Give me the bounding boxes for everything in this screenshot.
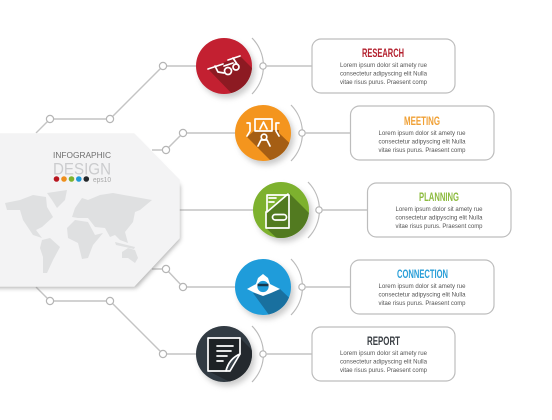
connection box: Lorem ipsum dolor sit amety rue [378,283,466,290]
item: connection [235,258,495,322]
panel title: INFOGRAPHIC [53,151,111,160]
report icon circle [196,326,262,386]
research arc and node [252,38,266,94]
panel title [53,151,111,184]
icon: folder [266,194,289,228]
research box: consectetur adipyscing elit Nulla [340,70,427,78]
report box [312,327,455,381]
item: meeting [235,105,494,172]
research box: vitae risus purus. Praesent comp [340,79,427,86]
connection box [350,260,494,314]
report box: REPORT [367,334,400,348]
meeting box: consectetur adipyscing elit Nulla [378,138,466,146]
item: report [196,326,455,386]
connection icon circle [235,259,296,322]
meeting box: MEETING [404,114,440,128]
report box: vitae risus purus. Praesent comp [340,367,427,374]
icon: note page [208,338,240,371]
item: planning [253,182,511,245]
connector: connection [152,265,235,291]
planning icon circle [253,182,315,245]
icon: research glasses [208,56,240,74]
connector: meeting [152,129,235,154]
connector: research [36,62,196,133]
center panel [0,134,180,288]
world map [5,190,152,273]
planning box: consectetur adipyscing elit Nulla [396,214,483,222]
meeting box: Lorem ipsum dolor sit amety rue [378,130,466,137]
color dots [54,176,89,182]
planning arc and node [308,182,322,238]
meeting box: vitae risus purus. Praesent comp [378,147,466,154]
meeting icon circle [235,105,296,168]
item: research [196,38,455,100]
research icon circle [196,38,262,100]
icon: presenter with board [247,119,279,146]
connector: report [36,287,196,358]
panel title: eps10 [93,177,111,184]
connection box: consectetur adipyscing elit Nulla [378,292,466,298]
report box: consectetur adipyscing elit Nulla [340,358,427,366]
panel title: DESIGN [53,160,111,178]
report arc and node [252,326,266,382]
meeting box [350,106,494,160]
planning box [368,183,511,237]
connection box: CONNECTION [397,267,448,281]
report box: Lorem ipsum dolor sit amety rue [340,350,427,357]
connection arc and node [291,259,305,315]
connector: planning [178,209,253,211]
meeting arc and node [291,105,305,161]
icon: connection figure [247,274,280,296]
research box: RESEARCH [362,46,404,60]
planning box: vitae risus purus. Praesent comp [396,223,483,230]
connection box: vitae risus purus. Praesent comp [378,300,466,307]
research box [312,39,455,93]
planning box: Lorem ipsum dolor sit amety rue [396,206,483,213]
research box: Lorem ipsum dolor sit amety rue [340,62,427,69]
planning box: PLANNING [419,190,459,204]
